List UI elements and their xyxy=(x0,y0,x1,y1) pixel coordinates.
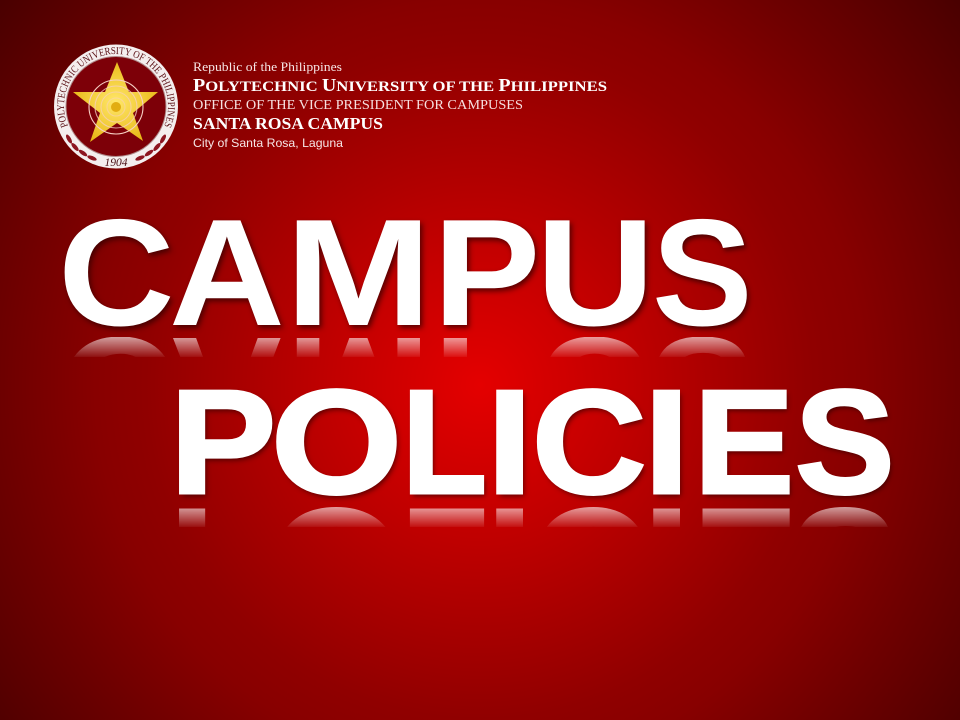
title: policies: E xyxy=(694,360,794,525)
title: campus: S xyxy=(652,188,753,358)
title: campus: A xyxy=(169,188,285,358)
header line: republic: Republic of the Philippines xyxy=(193,60,342,74)
title: policies: S xyxy=(795,360,894,525)
title: policies: L xyxy=(402,360,487,525)
title: policies: C xyxy=(532,360,646,525)
header text block xyxy=(193,60,607,150)
title: campus: C xyxy=(58,188,175,358)
title: policies: I xyxy=(644,360,689,525)
title reflection: policies xyxy=(179,507,888,527)
header line: office: OFFICE OF THE VICE PRESIDENT FOR CAMPUSES xyxy=(193,98,523,113)
title: policies: I xyxy=(487,360,532,525)
title: campus: M xyxy=(285,188,432,358)
header line: city: City of Santa Rosa, Laguna xyxy=(193,136,343,150)
title: campus: U xyxy=(536,188,654,358)
title reflection: campus xyxy=(74,337,745,357)
header line: campus: SANTA ROSA CAMPUS xyxy=(193,114,383,133)
logo: university seal xyxy=(54,44,178,169)
title: policies: P xyxy=(170,360,276,525)
title: campus: P xyxy=(433,188,541,358)
logo: university seal: 1904 xyxy=(104,157,128,169)
header line: university: POLYTECHNIC UNIVERSITY OF THE PHILIPPINES xyxy=(193,75,607,95)
title: policies: O xyxy=(271,360,403,525)
logo: university seal: POLYTECHNIC UNIVERSITY OF THE PHILIPPINES xyxy=(57,47,175,128)
